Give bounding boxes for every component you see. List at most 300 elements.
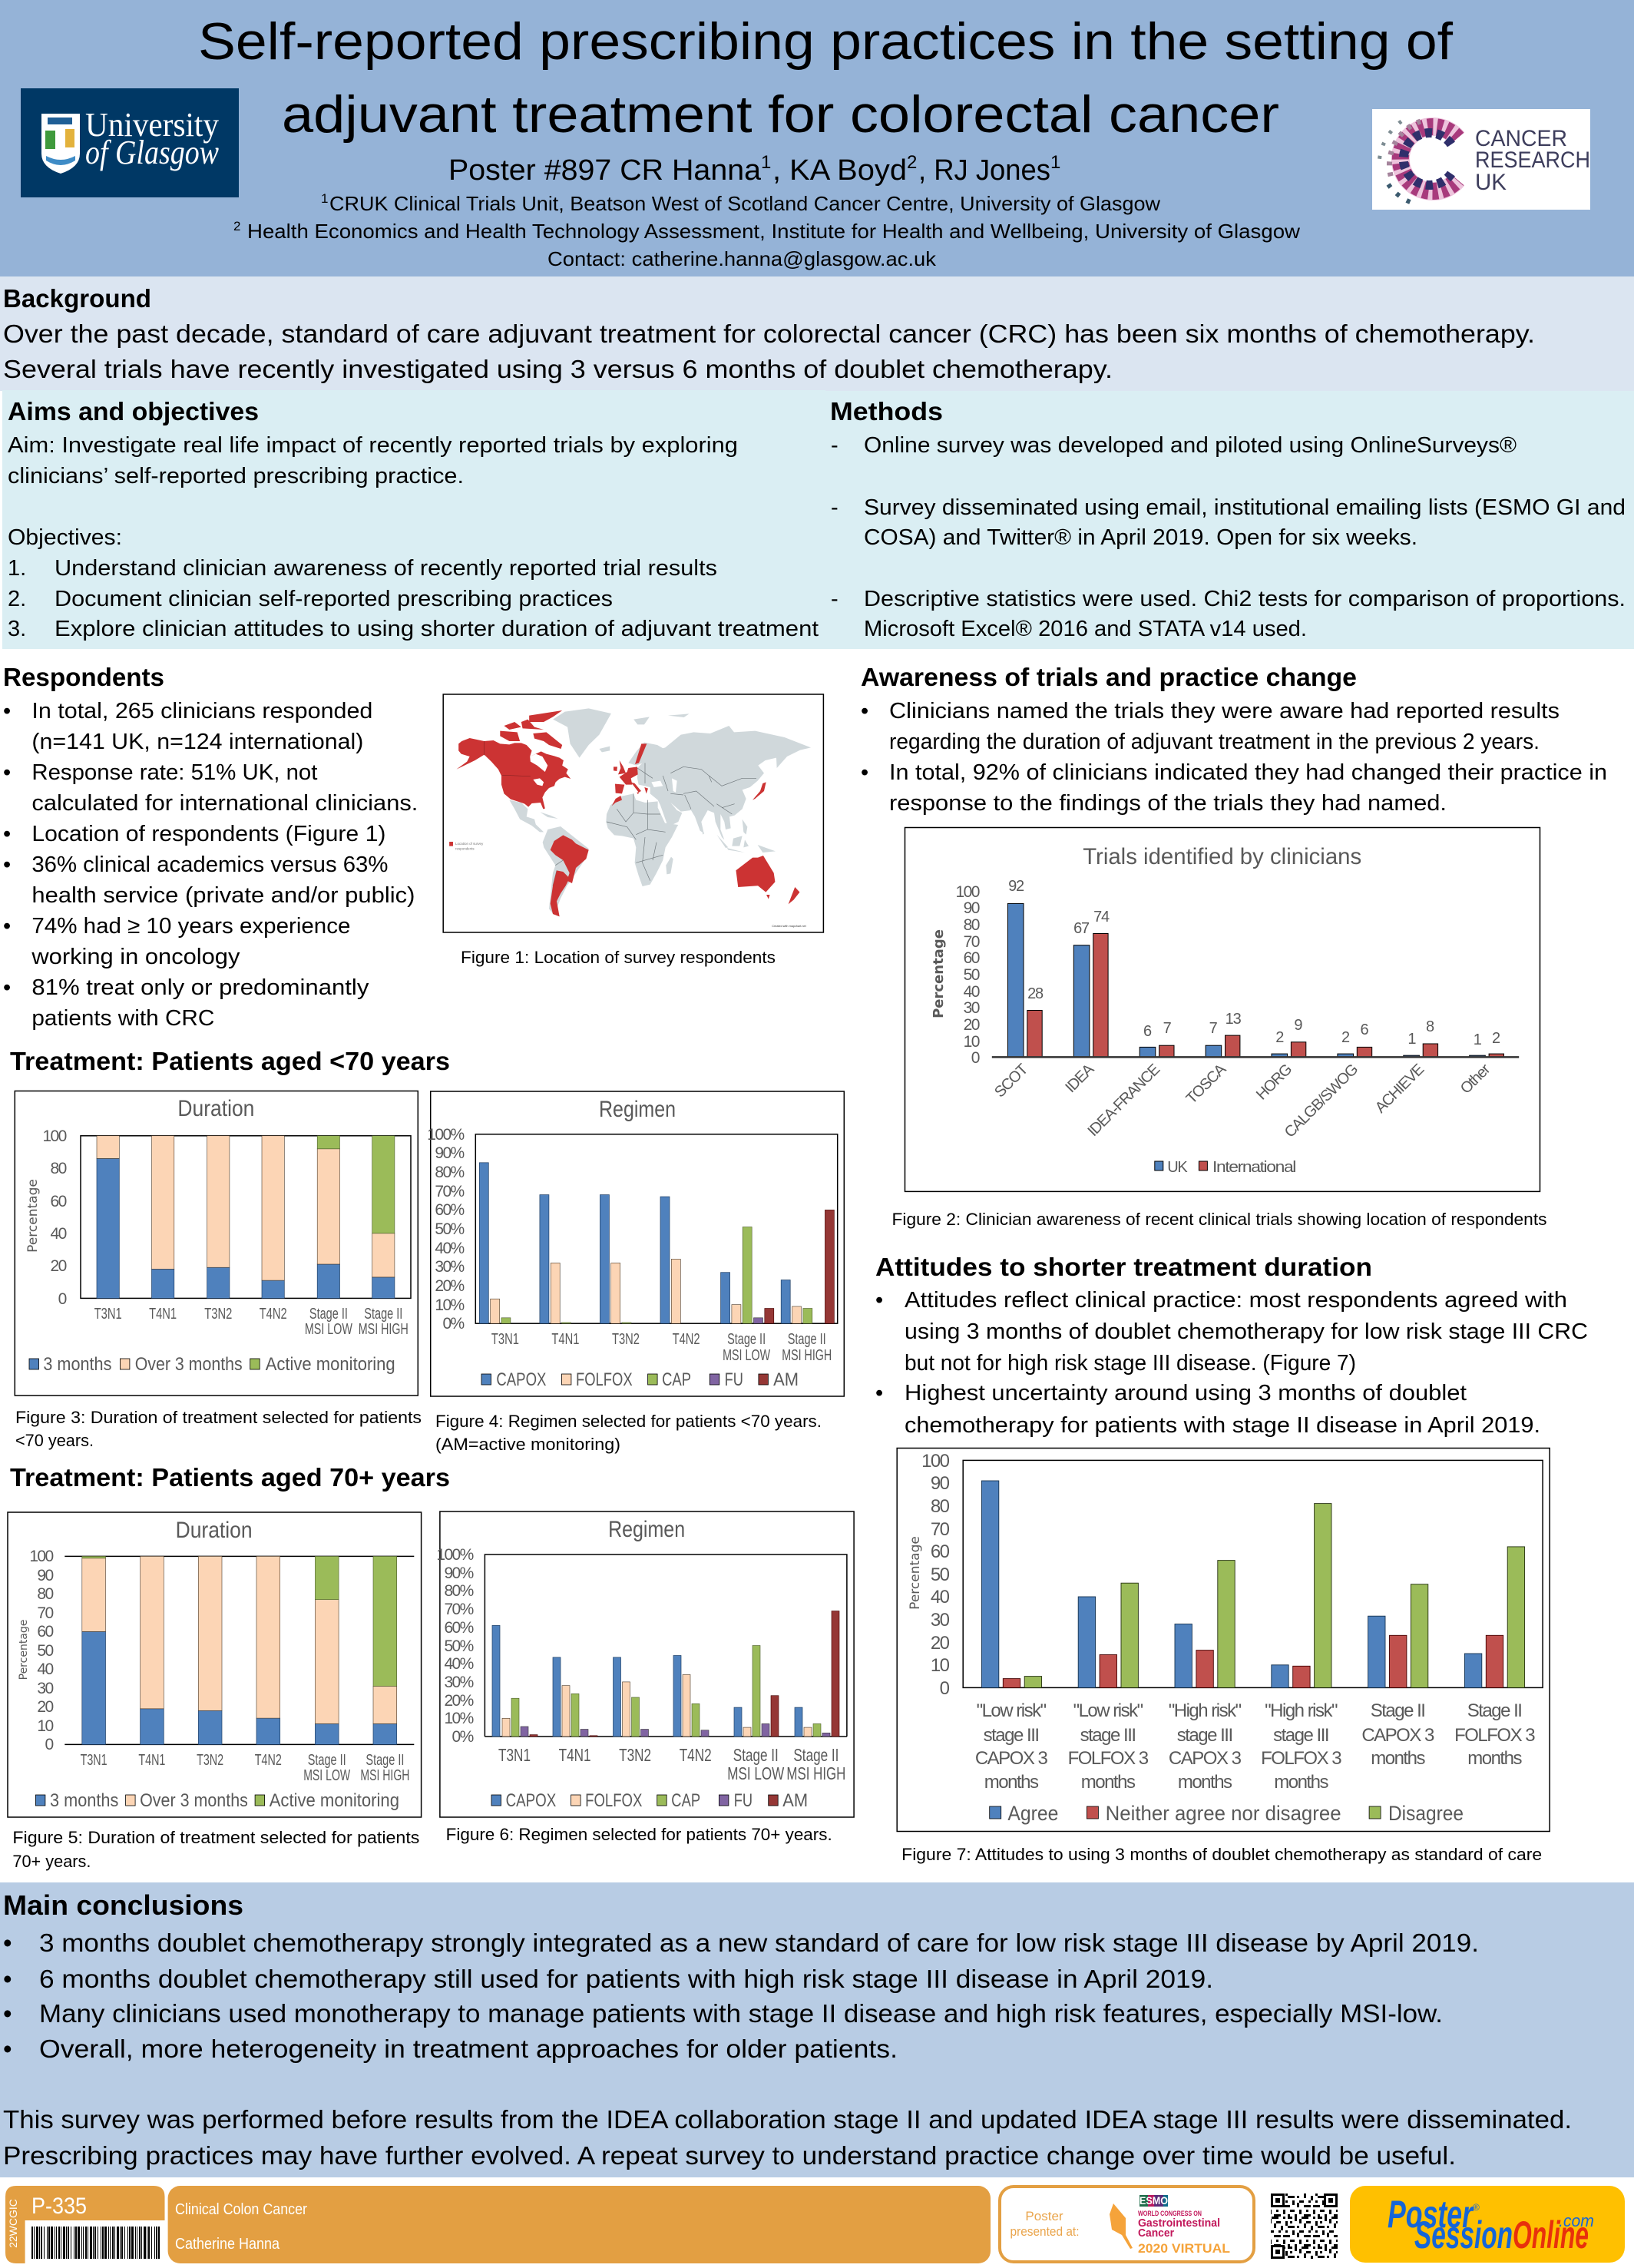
- figure 7: attitudes bar chart: 10: [931, 1655, 950, 1676]
- figure 5: duration chart 70 plus: 60: [37, 1623, 54, 1641]
- figure 6: regimen chart 70 plus: 30%: [444, 1674, 474, 1691]
- figure 5: duration chart 70 plus: Active monitoring: [270, 1790, 399, 1811]
- text: awareness bullets: •: [861, 760, 868, 785]
- figure 4: regimen chart under 70: T3N2: [612, 1331, 640, 1348]
- figure 2: trials bar chart: International: [1212, 1159, 1296, 1176]
- figure 4: regimen chart under 70: 50%: [435, 1220, 465, 1238]
- figure 3: duration chart under 70: T3N2: [204, 1306, 232, 1323]
- figure 5: duration chart 70 plus: 3 months: [50, 1790, 118, 1811]
- footer: PosterSessionOnline logo: .com: [1559, 2211, 1594, 2230]
- text: respondents bullets: working in oncology: [31, 945, 240, 969]
- figure 7: attitudes bar chart: FOLFOX 3: [1261, 1748, 1341, 1769]
- figure 6: regimen chart 70 plus: AM: [782, 1790, 808, 1811]
- text: aims list: Objectives:: [8, 525, 122, 550]
- authors: , KA Boyd: [772, 154, 907, 187]
- text: respondents bullets: 74% had ≥ 10 years experience: [31, 914, 350, 939]
- text: conclusions bullets: •: [3, 1999, 12, 2028]
- figure 5: duration chart 70 plus: 100: [29, 1548, 54, 1565]
- figure 3: duration chart under 70: Active monitoring: [266, 1354, 395, 1375]
- figure 4: regimen chart under 70: 80%: [435, 1164, 465, 1181]
- text: methods list: Microsoft Excel® 2016 and STATA v14 used.: [864, 617, 1307, 641]
- footer: poster id tab: [5, 2186, 164, 2263]
- figure 6: regimen chart 70 plus: MSI HIGH: [786, 1763, 845, 1783]
- figure 2: trials bar chart: 0: [971, 1049, 980, 1067]
- affiliations and contact: Health Economics and Health Technology Assessment, Institute for Health and Wellbeing, University of Glasgow: [247, 220, 1300, 243]
- figure 7: attitudes bar chart: 40: [931, 1587, 950, 1607]
- text: awareness bullets: [861, 699, 1607, 816]
- figure 6: regimen chart 70 plus: CAPOX: [506, 1790, 556, 1811]
- figure 3: duration chart under 70: 3 months: [43, 1354, 111, 1375]
- title: adjuvant treatment for colorectal cancer: [282, 85, 1279, 144]
- figure 3: duration chart under 70: Stage II: [364, 1306, 402, 1323]
- figure 7: attitudes bar chart: Stage II: [1467, 1700, 1521, 1721]
- figure 7: attitudes bar chart: stage III: [1080, 1725, 1136, 1746]
- text: background body: [3, 320, 1535, 383]
- figure 4: regimen chart under 70: 90%: [435, 1144, 465, 1162]
- footer: session and presenter: Clinical Colon Cancer: [175, 2201, 307, 2218]
- title: Self-reported prescribing practices in the setting of: [198, 12, 1453, 71]
- panel: respondents: [3, 663, 418, 1031]
- text: attitudes bullets: Highest uncertainty around using 3 months of doublet: [905, 1381, 1467, 1405]
- text: methods list: [831, 433, 1626, 641]
- figure 6: regimen chart 70 plus: Stage II: [793, 1745, 838, 1765]
- figure 2: trials bar chart: 40: [964, 983, 980, 1001]
- figure 2: trials bar chart: 30: [964, 999, 980, 1017]
- text: aims list: 1.: [8, 556, 26, 581]
- figure 4: regimen chart under 70: CAPOX: [496, 1369, 546, 1390]
- text: aims list: Aim: Investigate real life impact of recently reported trials by exploring: [8, 433, 738, 458]
- figure 6: regimen chart 70 plus: 50%: [444, 1637, 474, 1655]
- text: attitudes bullets: •: [875, 1381, 883, 1405]
- text: respondents bullets: 36% clinical academics versus 63%: [31, 853, 388, 877]
- text: awareness bullets: Clinicians named the trials they were aware had reported results: [889, 699, 1560, 723]
- affiliations and contact: CRUK Clinical Trials Unit, Beatson West of Scotland Cancer Centre, University of Glasgow: [329, 192, 1160, 215]
- title: [198, 12, 1453, 144]
- logo: Cancer Research UK: CANCER: [1475, 126, 1567, 151]
- figure 2: trials bar chart: 1: [1407, 1031, 1416, 1048]
- figure 2: trials bar chart: ACHIEVE: [1372, 1061, 1427, 1117]
- panel: methods: [825, 391, 1634, 649]
- figure 7: attitudes bar chart: stage III: [1177, 1725, 1232, 1746]
- figure 7: attitudes bar chart: 70: [931, 1519, 950, 1540]
- figure 4: regimen chart under 70: T4N1: [551, 1331, 579, 1348]
- figure 2: trials bar chart: 28: [1027, 985, 1044, 1002]
- figure 6: regimen chart 70 plus: FOLFOX: [585, 1790, 642, 1811]
- text: conclusions bullets: 3 months doublet chemotherapy strongly integrated as a new standard of care for low risk stage III disease by April 2019.: [39, 1929, 1479, 1957]
- figure 3: duration chart under 70: 100: [42, 1127, 67, 1145]
- caption: figure 7: Figure 7: Attitudes to using 3 months of doublet chemotherapy as standard of care: [901, 1845, 1542, 1864]
- figure 2: trials bar chart: 50: [964, 966, 980, 984]
- footer: poster id tab: 22WCGIC: [7, 2199, 19, 2248]
- figure 7: attitudes bar chart: FOLFOX 3: [1068, 1748, 1149, 1769]
- figure 2: trials bar chart: 7: [1209, 1020, 1218, 1037]
- affiliations and contact: [233, 191, 1300, 270]
- figure 7: attitudes bar chart: months: [1274, 1772, 1328, 1793]
- figure 2: trials bar chart: IDEA-FRANCE: [1084, 1061, 1163, 1140]
- caption: figure 2: Figure 2: Clinician awareness of recent clinical trials showing location of respondents: [892, 1210, 1546, 1229]
- text: conclusions bullets: Many clinicians used monotherapy to manage patients with stage II disease and high risk features, especially MSI-low.: [39, 1999, 1443, 2028]
- footer: presented at congress: WORLD CONGRESS ON: [1138, 2210, 1202, 2217]
- figure 7: attitudes bar chart: 30: [931, 1610, 950, 1631]
- figure 3: duration chart under 70: Duration: [177, 1096, 254, 1121]
- authors: Poster #897 CR Hanna: [448, 154, 762, 187]
- figure 2: trials bar chart: 1: [1474, 1031, 1482, 1048]
- icon: QR code: [1271, 2194, 1338, 2259]
- figure 5: duration chart 70 plus: 90: [37, 1567, 54, 1584]
- figure 4: regimen chart under 70: T4N2: [673, 1331, 700, 1348]
- figure 2: trials bar chart: 67: [1073, 920, 1090, 937]
- text: attitudes bullets: Attitudes reflect clinical practice: most respondents agreed with: [905, 1288, 1567, 1313]
- footer: PosterSessionOnline logo: Poster: [1388, 2193, 1474, 2236]
- figure 6: regimen chart 70 plus: T4N1: [559, 1745, 591, 1765]
- logo: Cancer Research UK: RESEARCH: [1475, 147, 1590, 173]
- logo: Cancer Research UK: [1372, 109, 1590, 210]
- text: respondents bullets: (n=141 UK, n=124 international): [31, 730, 363, 754]
- text: respondents bullets: health service (private and/or public): [31, 883, 415, 908]
- figure 7: attitudes bar chart: Percentage: [908, 1536, 923, 1610]
- caption: figure 5: 70+ years.: [12, 1852, 91, 1871]
- caption: figure 6: Figure 6: Regimen selected for patients 70+ years.: [446, 1825, 832, 1844]
- figure 4: regimen chart under 70: 60%: [435, 1201, 465, 1219]
- figure 2: trials bar chart: 92: [1008, 878, 1024, 895]
- figure 1: world map: respondents: [455, 847, 475, 851]
- text: respondents bullets: [3, 699, 418, 1031]
- text: respondents bullets: •: [3, 853, 11, 877]
- text: respondents bullets: •: [3, 760, 11, 785]
- figure 7: attitudes bar chart: 90: [931, 1473, 950, 1494]
- text: conclusions bullets: •: [3, 1929, 12, 1957]
- figure 3: duration chart under 70: Over 3 months: [135, 1354, 243, 1375]
- figure 2: trials bar chart: 60: [964, 949, 980, 967]
- figure 3: duration chart under 70: 60: [51, 1193, 67, 1210]
- figure 5: duration chart 70 plus: T3N2: [197, 1752, 223, 1769]
- caption: figure 3: <70 years.: [15, 1431, 94, 1450]
- figure 2: trials bar chart: 9: [1294, 1017, 1302, 1034]
- header band: [0, 0, 1634, 276]
- figure 2: trials bar chart: 100: [956, 883, 980, 901]
- footer: session and presenter: Catherine Hanna: [175, 2236, 280, 2253]
- text: methods list: COSA) and Twitter® in April 2019. Open for six weeks.: [864, 525, 1417, 550]
- figure 4: regimen chart under 70: Stage II: [727, 1331, 766, 1348]
- figure 7: attitudes bar chart: months: [1371, 1748, 1425, 1769]
- figure 6: regimen chart 70 plus: T4N2: [680, 1745, 712, 1765]
- figure 6: regimen chart 70 plus: 90%: [444, 1564, 474, 1582]
- figure 5: duration chart 70 plus: MSI HIGH: [360, 1767, 409, 1784]
- figure 5: duration chart 70 plus: 50: [37, 1642, 54, 1660]
- figure 2: trials bar chart: 2: [1492, 1030, 1500, 1047]
- figure 7: attitudes bar chart: CAPOX 3: [1169, 1748, 1242, 1769]
- figure 6: regimen chart 70 plus: 40%: [444, 1655, 474, 1673]
- text: respondents bullets: Response rate: 51% UK, not: [31, 760, 317, 785]
- text: respondents bullets: •: [3, 975, 11, 1000]
- footer: PosterSessionOnline logo: Online: [1513, 2213, 1589, 2256]
- figure 5: duration chart 70 plus: Stage II: [308, 1752, 346, 1769]
- footer: PosterSessionOnline logo: [1350, 2186, 1625, 2263]
- figure 6: regimen chart 70 plus: T3N1: [498, 1745, 531, 1765]
- caption: figure 5: [12, 1828, 419, 1871]
- text: methods list: Online survey was developed and piloted using OnlineSurveys®: [864, 433, 1517, 458]
- figure 2: trials bar chart: 10: [964, 1033, 980, 1051]
- figure 4: regimen chart under 70: [427, 1091, 844, 1396]
- figure 2: trials bar chart: 6: [1143, 1023, 1152, 1040]
- figure 3: duration chart under 70: 80: [51, 1160, 67, 1177]
- figure 4: regimen chart under 70: Regimen: [599, 1097, 676, 1122]
- figure 7: attitudes bar chart: months: [1081, 1772, 1136, 1793]
- footer: poster id tab: P-335: [31, 2194, 87, 2219]
- figure 4: regimen chart under 70: AM: [773, 1369, 799, 1390]
- figure 2: trials bar chart: 2: [1341, 1029, 1350, 1046]
- text: awareness bullets: •: [861, 699, 868, 723]
- figure 1: world map: [443, 694, 823, 932]
- text: aims list: Explore clinician attitudes to using shorter duration of adjuvant treatment: [55, 617, 819, 641]
- footer: presented at congress: [1000, 2187, 1254, 2262]
- heading: methods: Methods: [830, 397, 943, 425]
- panel: main conclusions: [0, 1882, 1634, 2177]
- authors: 1: [1050, 152, 1060, 173]
- footer: PosterSessionOnline logo: ®: [1473, 2202, 1480, 2213]
- footer: session and presenter: [168, 2186, 991, 2263]
- figure 7: attitudes bar chart: Stage II: [1371, 1700, 1424, 1721]
- figure 1: world map: Location of survey: [455, 842, 484, 846]
- figure 7: attitudes bar chart: CAPOX 3: [975, 1748, 1048, 1769]
- figure 3: duration chart under 70: 20: [51, 1257, 67, 1275]
- figure 2: trials bar chart: SCOT: [991, 1061, 1031, 1101]
- text: methods list: -: [831, 433, 838, 458]
- figure 6: regimen chart 70 plus: Stage II: [733, 1745, 779, 1765]
- figure 7: attitudes bar chart: FOLFOX 3: [1454, 1725, 1535, 1746]
- figure 2: trials bar chart: [905, 828, 1540, 1191]
- authors: 2: [907, 152, 917, 173]
- figure 7: attitudes bar chart: months: [1467, 1748, 1522, 1769]
- figure 5: duration chart 70 plus: T3N1: [81, 1752, 108, 1769]
- panel: attitudes: [875, 1253, 1588, 1438]
- figure 7: attitudes bar chart: 60: [931, 1541, 950, 1562]
- figure 2: trials bar chart: IDEA: [1062, 1061, 1098, 1096]
- figure 7: attitudes bar chart: [897, 1449, 1550, 1831]
- text: aims list: 3.: [8, 617, 26, 641]
- text: awareness bullets: response to the findings of the trials they had named.: [889, 791, 1447, 816]
- figure 7: attitudes bar chart: stage III: [1273, 1725, 1328, 1746]
- figure 7: attitudes bar chart: 50: [931, 1564, 950, 1585]
- figure 7: attitudes bar chart: Neither agree nor disagree: [1106, 1802, 1341, 1825]
- figure 7: attitudes bar chart: months: [1178, 1772, 1232, 1793]
- panel: aims and objectives: [2, 390, 825, 649]
- footer: presented at congress: Cancer: [1138, 2227, 1174, 2240]
- figure 5: duration chart 70 plus: 40: [37, 1660, 54, 1678]
- text: closing note: Prescribing practices may have further evolved. A repeat survey to understand practice change over time would be useful.: [3, 2141, 1456, 2170]
- figure 7: attitudes bar chart: 80: [931, 1496, 950, 1517]
- figure 7: attitudes bar chart: 100: [921, 1451, 950, 1472]
- figure 2: trials bar chart: 8: [1426, 1018, 1434, 1035]
- text: attitudes bullets: but not for high risk stage III disease. (Figure 7): [905, 1351, 1356, 1376]
- figure 7: attitudes bar chart: Disagree: [1388, 1802, 1464, 1825]
- figure 4: regimen chart under 70: T3N1: [491, 1331, 519, 1348]
- figure 7: attitudes bar chart: "High risk": [1265, 1700, 1338, 1721]
- figure 5: duration chart 70 plus: Duration: [176, 1518, 253, 1543]
- heading: treatment under 70: Treatment: Patients aged <70 years: [10, 1047, 450, 1075]
- figure 5: duration chart 70 plus: T4N2: [255, 1752, 282, 1769]
- figure 4: regimen chart under 70: 100%: [427, 1126, 465, 1144]
- figure 4: regimen chart under 70: 0%: [442, 1315, 465, 1333]
- text: conclusions bullets: Overall, more heterogeneity in treatment approaches for older patients.: [39, 2035, 898, 2063]
- figure 4: regimen chart under 70: Stage II: [788, 1331, 826, 1348]
- figure 7: attitudes bar chart: stage III: [984, 1725, 1039, 1746]
- text: respondents bullets: •: [3, 822, 11, 846]
- text: attitudes bullets: chemotherapy for patients with stage II disease in April 2019.: [905, 1413, 1540, 1438]
- figure 3: duration chart under 70: 0: [58, 1290, 67, 1308]
- figure 3: duration chart under 70: Percentage: [25, 1179, 41, 1253]
- text: background body: Over the past decade, standard of care adjuvant treatment for colorectal cancer (CRC) has been six months of chemotherapy.: [3, 320, 1535, 348]
- text: attitudes bullets: using 3 months of doublet chemotherapy for low risk stage III CRC: [905, 1319, 1588, 1344]
- figure 5: duration chart 70 plus: 10: [37, 1717, 54, 1735]
- heading: attitudes: Attitudes to shorter treatment duration: [875, 1253, 1372, 1281]
- figure 3: duration chart under 70: MSI LOW: [305, 1321, 352, 1338]
- text: methods list: -: [831, 495, 838, 520]
- text: closing note: This survey was performed before results from the IDEA collaboration stage II and updated IDEA stage III results were disseminated.: [3, 2105, 1572, 2134]
- text: aims list: Document clinician self-reported prescribing practices: [55, 587, 613, 611]
- figure 4: regimen chart under 70: 30%: [435, 1258, 465, 1276]
- icon: ESMO logo: ESMO: [1140, 2194, 1168, 2207]
- caption: figure 3: Figure 3: Duration of treatment selected for patients: [15, 1408, 422, 1427]
- figure 5: duration chart 70 plus: T4N1: [138, 1752, 165, 1769]
- figure 5: duration chart 70 plus: MSI LOW: [303, 1767, 350, 1784]
- figure 3: duration chart under 70: T4N2: [260, 1306, 287, 1323]
- figure 5: duration chart 70 plus: [8, 1512, 422, 1817]
- heading: background: Background: [3, 284, 151, 313]
- heading: awareness: Awareness of trials and practice change: [861, 663, 1357, 691]
- figure 2: trials bar chart: 70: [964, 933, 980, 951]
- figure 7: attitudes bar chart: Agree: [1007, 1802, 1058, 1825]
- figure 4: regimen chart under 70: 10%: [435, 1296, 465, 1314]
- figure 5: duration chart 70 plus: 30: [37, 1680, 54, 1697]
- figure 2: trials bar chart: 2: [1275, 1029, 1284, 1046]
- text: aims list: Understand clinician awareness of recently reported trial results: [55, 556, 717, 581]
- text: attitudes bullets: [875, 1288, 1588, 1438]
- figure 6: regimen chart 70 plus: 20%: [444, 1692, 474, 1710]
- figure 2: trials bar chart: Trials identified by clinicians: [1083, 844, 1361, 869]
- text: respondents bullets: patients with CRC: [31, 1006, 214, 1031]
- figure 5: duration chart 70 plus: 80: [37, 1585, 54, 1603]
- figure 4: regimen chart under 70: FOLFOX: [576, 1369, 633, 1390]
- text: conclusions bullets: 6 months doublet chemotherapy still used for patients with high risk stage III disease in April 2019.: [39, 1965, 1213, 1993]
- figure 4: regimen chart under 70: FU: [725, 1369, 743, 1390]
- figure 7: attitudes bar chart: 0: [940, 1678, 950, 1699]
- affiliations and contact: 2: [233, 219, 240, 233]
- text: aims list: 2.: [8, 587, 26, 611]
- footer: presented at congress: Poster: [1025, 2209, 1063, 2223]
- figure 4: regimen chart under 70: CAP: [662, 1369, 691, 1390]
- figure 4: regimen chart under 70: 70%: [435, 1183, 465, 1200]
- figure 2: trials bar chart: HORG: [1253, 1061, 1295, 1104]
- figure 6: regimen chart 70 plus: MSI LOW: [727, 1763, 785, 1783]
- logo: University of Glasgow: [21, 88, 239, 197]
- figure 3: duration chart under 70: 40: [51, 1225, 67, 1243]
- figure 6: regimen chart 70 plus: 100%: [436, 1546, 474, 1564]
- figure 5: duration chart 70 plus: 70: [37, 1604, 54, 1622]
- logo: University of Glasgow: of Glasgow: [85, 134, 220, 171]
- icon: wheat leaf: [1110, 2203, 1133, 2249]
- figure 6: regimen chart 70 plus: T3N2: [619, 1745, 651, 1765]
- figure 2: trials bar chart: UK: [1167, 1159, 1188, 1176]
- figure 6: regimen chart 70 plus: 0%: [452, 1728, 474, 1746]
- caption: figure 4: [435, 1412, 822, 1454]
- figure 2: trials bar chart: 7: [1163, 1020, 1172, 1037]
- figure 6: regimen chart 70 plus: 70%: [444, 1601, 474, 1618]
- caption: figure 5: Figure 5: Duration of treatment selected for patients: [12, 1828, 419, 1847]
- affiliations and contact: Contact: catherine.hanna@glasgow.ac.uk: [547, 247, 937, 270]
- text: conclusions bullets: •: [3, 2035, 12, 2063]
- figure 2: trials bar chart: CALGB/SWOG: [1282, 1061, 1361, 1141]
- figure 3: duration chart under 70: MSI HIGH: [359, 1321, 408, 1338]
- authors: [448, 152, 1060, 187]
- text: respondents bullets: Location of respondents (Figure 1): [31, 822, 385, 846]
- figure 5: duration chart 70 plus: Over 3 months: [140, 1790, 248, 1811]
- figure 6: regimen chart 70 plus: 10%: [444, 1710, 474, 1727]
- heading: aims: Aims and objectives: [8, 397, 259, 425]
- footer: presented at congress: presented at:: [1011, 2224, 1080, 2239]
- panel: awareness of trials: [861, 663, 1607, 816]
- footer: presented at congress: 2020 VIRTUAL: [1138, 2241, 1230, 2256]
- text: attitudes bullets: •: [875, 1288, 883, 1313]
- text: methods list: Descriptive statistics were used. Chi2 tests for comparison of proportions.: [864, 587, 1626, 611]
- figure 2: trials bar chart: 20: [964, 1016, 980, 1034]
- footer: presented at congress: Gastrointestinal: [1138, 2217, 1220, 2230]
- figure 5: duration chart 70 plus: 0: [45, 1736, 54, 1753]
- figure 5: duration chart 70 plus: 20: [37, 1698, 54, 1716]
- figure 6: regimen chart 70 plus: Regimen: [608, 1517, 685, 1542]
- figure 7: attitudes bar chart: 20: [931, 1633, 950, 1654]
- figure 5: duration chart 70 plus: Percentage: [18, 1620, 30, 1680]
- text: methods list: Survey disseminated using email, institutional emailing lists (ESMO GI and: [864, 495, 1626, 520]
- figure 3: duration chart under 70: Stage II: [309, 1306, 348, 1323]
- text: respondents bullets: In total, 265 clinicians responded: [31, 699, 372, 723]
- figure 6: regimen chart 70 plus: FU: [734, 1790, 752, 1811]
- affiliations and contact: 1: [321, 191, 328, 206]
- figure 2: trials bar chart: TOSCA: [1183, 1061, 1230, 1108]
- text: awareness bullets: In total, 92% of clinicians indicated they had changed their practice in: [889, 760, 1607, 785]
- barcode: [31, 2227, 160, 2259]
- figure 2: trials bar chart: 80: [964, 916, 980, 934]
- text: awareness bullets: regarding the duration of adjuvant treatment in the previous 2 years.: [889, 730, 1540, 754]
- figure 4: regimen chart under 70: 40%: [435, 1240, 465, 1257]
- figure 6: regimen chart 70 plus: [436, 1511, 854, 1817]
- figure 4: regimen chart under 70: MSI LOW: [723, 1347, 770, 1364]
- figure 3: duration chart under 70: T4N1: [149, 1306, 177, 1323]
- figure 4: regimen chart under 70: MSI HIGH: [782, 1347, 832, 1364]
- heading: main conclusions: Main conclusions: [3, 1889, 243, 1921]
- panel: background: [0, 276, 1634, 391]
- authors: , RJ Jones: [918, 154, 1050, 187]
- logo: University of Glasgow: University: [85, 106, 219, 144]
- caption: figure 3: [15, 1408, 422, 1450]
- figure 4: regimen chart under 70: 20%: [435, 1277, 465, 1295]
- caption: figure 1: Figure 1: Location of survey respondents: [461, 948, 776, 967]
- text: background body: Several trials have recently investigated using 3 versus 6 months of doublet chemotherapy.: [3, 355, 1113, 383]
- figure 3: duration chart under 70: T3N1: [94, 1306, 122, 1323]
- figure 6: regimen chart 70 plus: CAP: [671, 1790, 700, 1811]
- text: methods list: -: [831, 587, 838, 611]
- figure 2: trials bar chart: 74: [1093, 909, 1110, 925]
- figure 6: regimen chart 70 plus: 80%: [444, 1582, 474, 1600]
- caption: figure 4: Figure 4: Regimen selected for patients <70 years.: [435, 1412, 822, 1431]
- figure 5: duration chart 70 plus: Stage II: [366, 1752, 404, 1769]
- heading: respondents: Respondents: [3, 663, 164, 691]
- figure 7: attitudes bar chart: months: [984, 1772, 1039, 1793]
- caption: figure 4: (AM=active monitoring): [435, 1435, 620, 1454]
- text: respondents bullets: 81% treat only or predominantly: [31, 975, 369, 1000]
- text: respondents bullets: calculated for international clinicians.: [31, 791, 418, 816]
- authors: 1: [761, 152, 771, 173]
